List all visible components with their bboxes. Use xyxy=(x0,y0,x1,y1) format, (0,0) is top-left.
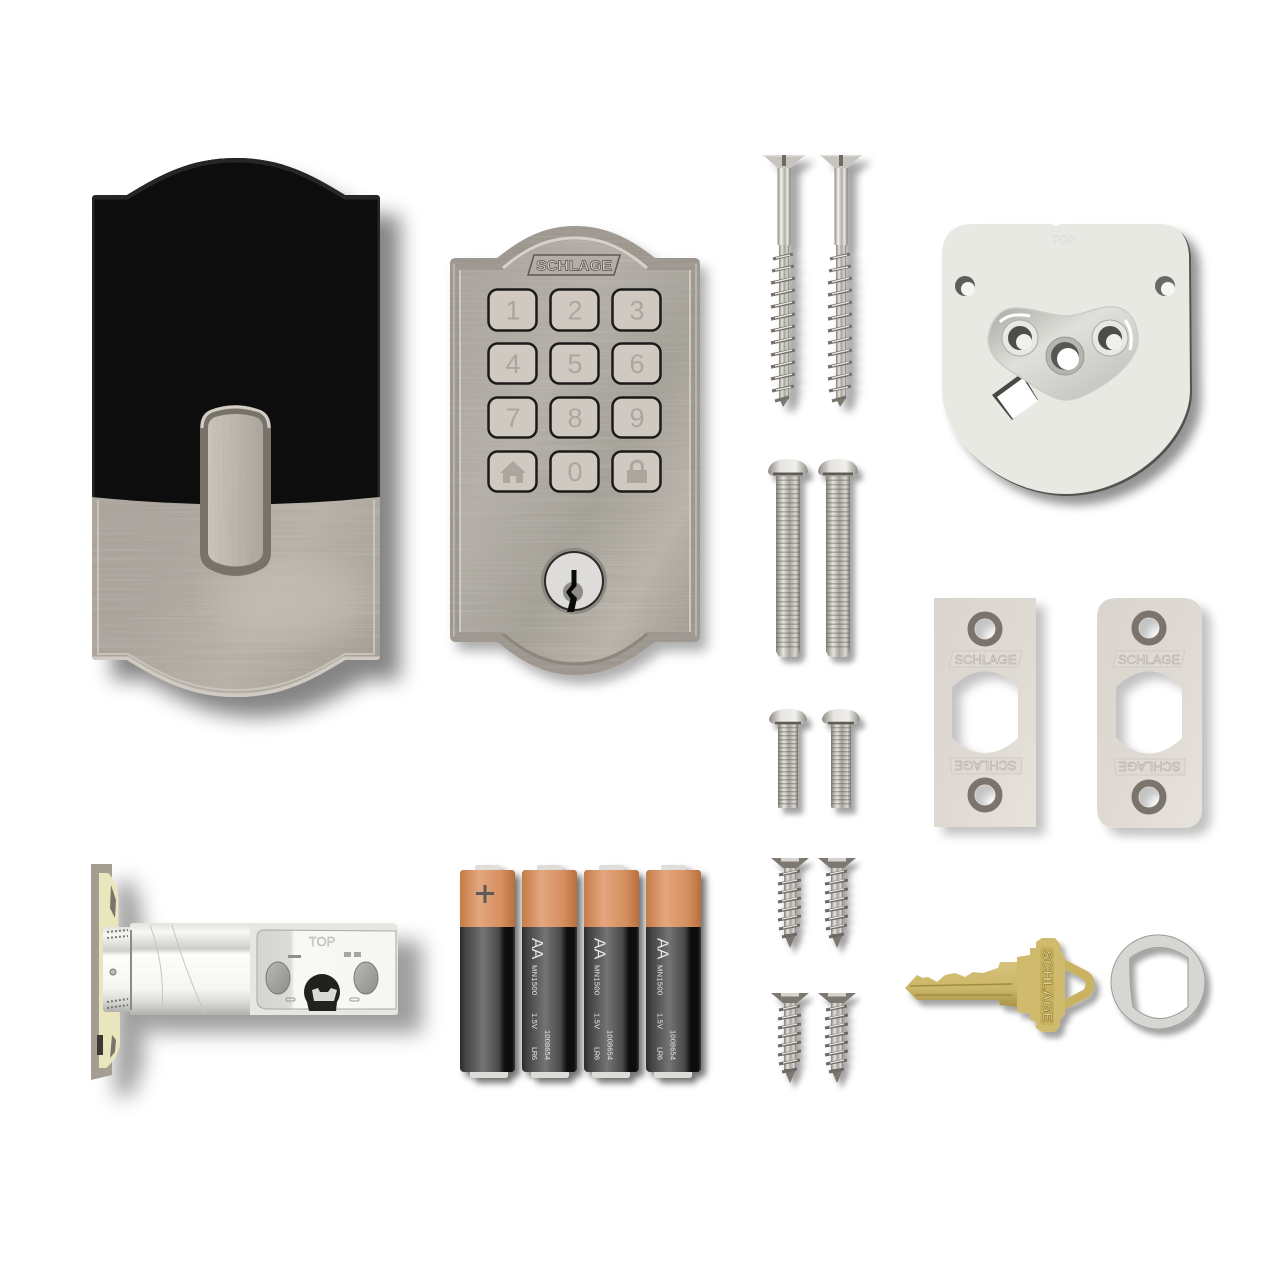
keypad buttons: 1 xyxy=(505,296,521,326)
key blade xyxy=(905,962,1017,1007)
screw hole rings xyxy=(971,615,999,809)
label: embossed TOP: TOP xyxy=(1052,233,1076,247)
panel: exterior keypad xyxy=(450,226,700,676)
screws: short wood screws upper pair xyxy=(771,858,856,948)
embossed Schlage text: SCHLAGE xyxy=(1118,759,1180,774)
battery 3: MN1500 xyxy=(592,965,602,995)
key loop xyxy=(1062,963,1090,1006)
icon: home xyxy=(500,461,526,483)
battery 3: LR6 xyxy=(592,1047,602,1060)
latch cylinder xyxy=(130,923,255,1015)
embossed Schlage text: SCHLAGE xyxy=(954,652,1017,667)
latch case xyxy=(250,923,398,1015)
keypad buttons: 4 xyxy=(505,349,521,379)
strike plate: rounded xyxy=(1097,598,1202,828)
shape: back unit body xyxy=(92,92,380,698)
keypad buttons: 8 xyxy=(567,403,583,433)
shape: rounded plate body xyxy=(1097,598,1202,828)
shape: plate body xyxy=(942,224,1192,496)
panel: deadbolt latch xyxy=(91,864,398,1080)
keypad buttons: 5 xyxy=(567,349,583,379)
shape: square plate body xyxy=(934,598,1036,827)
screws: long wood screws pair xyxy=(763,155,862,407)
battery 4: AA xyxy=(654,938,670,960)
screws: short machine screws pair xyxy=(769,709,860,808)
battery 4: LR6 xyxy=(656,1047,664,1060)
keypad buttons: 0 xyxy=(567,457,583,487)
panel: four AA batteries xyxy=(460,865,701,1078)
shape: keypad escutcheon xyxy=(450,226,700,676)
logo: Schlage badge: SCHLAGE xyxy=(536,258,612,274)
icon: key cylinder xyxy=(541,548,607,614)
panel: mounting plate xyxy=(942,224,1192,496)
embossed TOP label: TOP xyxy=(309,934,335,949)
key bow xyxy=(1017,938,1065,1032)
infographic canvas: kit parts layout xyxy=(91,155,1216,1107)
embossed Schlage text: SCHLAGE xyxy=(1118,652,1180,667)
keypad buttons: 6 xyxy=(629,349,645,379)
battery 3: AA xyxy=(590,938,608,960)
raised boss with three holes xyxy=(988,307,1138,400)
battery 4: MN1500 xyxy=(656,965,664,995)
battery 2: AA xyxy=(528,938,545,960)
key blade groove xyxy=(910,984,1012,995)
embossed Schlage text xyxy=(1113,651,1185,775)
battery 2: 1.5V xyxy=(530,1013,539,1029)
battery 4 xyxy=(646,865,701,1078)
mounting holes xyxy=(955,276,1175,296)
battery 3 xyxy=(584,865,639,1078)
icon: thumbturn xyxy=(200,405,271,576)
strike plate: square xyxy=(934,598,1036,827)
embossed Schlage text: SCHLAGE xyxy=(954,758,1016,773)
battery 3: 1.5V xyxy=(592,1013,602,1029)
screw hole rings xyxy=(1135,614,1163,811)
latch faceplate xyxy=(91,864,120,1080)
embossed Schlage text xyxy=(949,651,1022,774)
battery 1 xyxy=(460,865,515,1078)
battery 4: 1.5V xyxy=(656,1013,664,1029)
latch neck xyxy=(103,927,132,1012)
panel: interior lock assembly (black cover with thumbturn) xyxy=(92,92,380,698)
icon: padlock xyxy=(627,460,647,483)
battery 4: 1008654 xyxy=(668,1030,678,1060)
keypad buttons: 7 xyxy=(505,403,521,433)
spacer ring xyxy=(1111,935,1205,1029)
screws: short wood screws lower pair xyxy=(771,993,856,1083)
battery 2: 1008654 xyxy=(543,1030,552,1060)
key bow text: SCHLAGE xyxy=(1040,950,1055,1022)
slot xyxy=(992,373,1038,420)
battery 2 xyxy=(522,865,577,1078)
keypad buttons: 3 xyxy=(629,296,645,326)
keypad buttons: 9 xyxy=(629,403,645,433)
keypad buttons: 2 xyxy=(567,296,583,326)
screws: long machine screws pair xyxy=(768,459,858,657)
battery 2: MN1500 xyxy=(530,965,539,995)
brass key xyxy=(905,938,1090,1032)
battery 2: LR6 xyxy=(530,1047,539,1060)
battery 3: 1008654 xyxy=(606,1030,614,1060)
keypad buttons xyxy=(488,290,660,492)
logo: Schlage badge xyxy=(528,255,620,275)
